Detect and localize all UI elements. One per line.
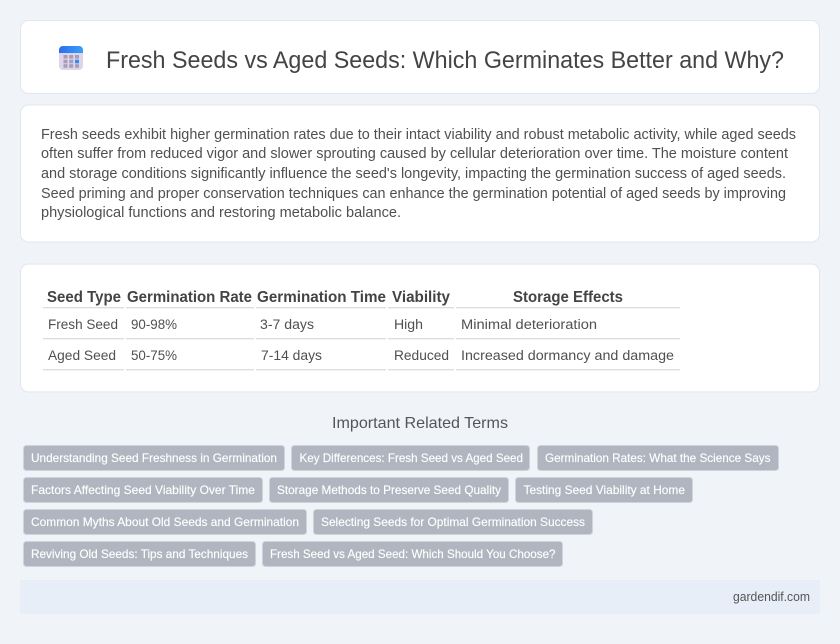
panel: description <box>20 105 820 242</box>
table row: fresh seed <box>48 317 597 333</box>
tag: Selecting Seeds for Optimal Germination Success <box>321 515 585 529</box>
table header row: Germination Rate <box>127 289 252 306</box>
table row: aged seed: Increased dormancy and damage <box>461 348 674 364</box>
table row: aged seed: 7-14 days <box>261 348 322 364</box>
table row: fresh seed: Fresh Seed <box>48 317 118 333</box>
table row: fresh seed: Minimal deterioration <box>461 317 597 333</box>
tag <box>24 478 262 502</box>
text block: description: physiological functions and restoring metabolic balance. <box>41 205 401 221</box>
tag: Key Differences: Fresh Seed vs Aged Seed <box>300 451 523 465</box>
text block: description: and storage conditions significantly influence the seed's longevity, impacting the germination success of aged seeds. <box>41 166 786 182</box>
table header row: Storage Effects <box>513 289 623 306</box>
table row: fresh seed: High <box>394 317 423 333</box>
table header row: Seed Type <box>47 289 121 306</box>
panel: comparison table <box>20 264 820 392</box>
title: Fresh Seeds vs Aged Seeds: Which Germinates Better and Why? <box>106 47 784 74</box>
tag: Fresh Seed vs Aged Seed: Which Should You Choose? <box>270 547 556 561</box>
tag: Factors Affecting Seed Viability Over Time <box>31 483 255 497</box>
tag <box>314 510 592 534</box>
table header row <box>47 289 623 306</box>
text block: description: often suffer from reduced vigor and slower sprouting caused by cellular deterioration over time. The moisture content <box>41 146 788 162</box>
tag: Germination Rates: What the Science Says <box>545 451 770 465</box>
table row: fresh seed: 3-7 days <box>260 317 314 333</box>
text block: description <box>41 127 796 221</box>
tag <box>262 542 562 566</box>
tag <box>24 542 256 566</box>
tag <box>24 510 306 534</box>
icon: calendar <box>59 46 83 70</box>
table row: aged seed: 50-75% <box>131 348 177 364</box>
tag: Understanding Seed Freshness in Germination <box>31 451 277 465</box>
tag: Reviving Old Seeds: Tips and Techniques <box>31 547 248 561</box>
heading: related terms: Important Related Terms <box>332 415 508 432</box>
related term tags <box>24 446 778 566</box>
tag <box>538 446 778 470</box>
text block: description: Fresh seeds exhibit higher germination rates due to their intact viability and robust metabolic activity, while aged seeds <box>41 127 796 143</box>
table row: aged seed <box>48 348 674 364</box>
tag <box>270 478 508 502</box>
table header row: Germination Time <box>257 289 386 306</box>
table row: aged seed: Reduced <box>394 348 449 364</box>
footer <box>20 580 820 614</box>
panel: header <box>20 20 820 94</box>
tag <box>292 446 530 470</box>
text block: description: Seed priming and proper conservation techniques can enhance the germination potential of aged seeds by improving <box>41 186 786 202</box>
tag: Testing Seed Viability at Home <box>524 483 685 497</box>
tag: Common Myths About Old Seeds and Germination <box>31 515 299 529</box>
tag <box>516 478 692 502</box>
table row: fresh seed: 90-98% <box>131 317 177 333</box>
tag: Storage Methods to Preserve Seed Quality <box>277 483 501 497</box>
table header row: Viability <box>392 289 450 306</box>
tag <box>24 446 284 470</box>
footer: gardendif.com <box>733 589 810 604</box>
table row: aged seed: Aged Seed <box>48 348 116 364</box>
